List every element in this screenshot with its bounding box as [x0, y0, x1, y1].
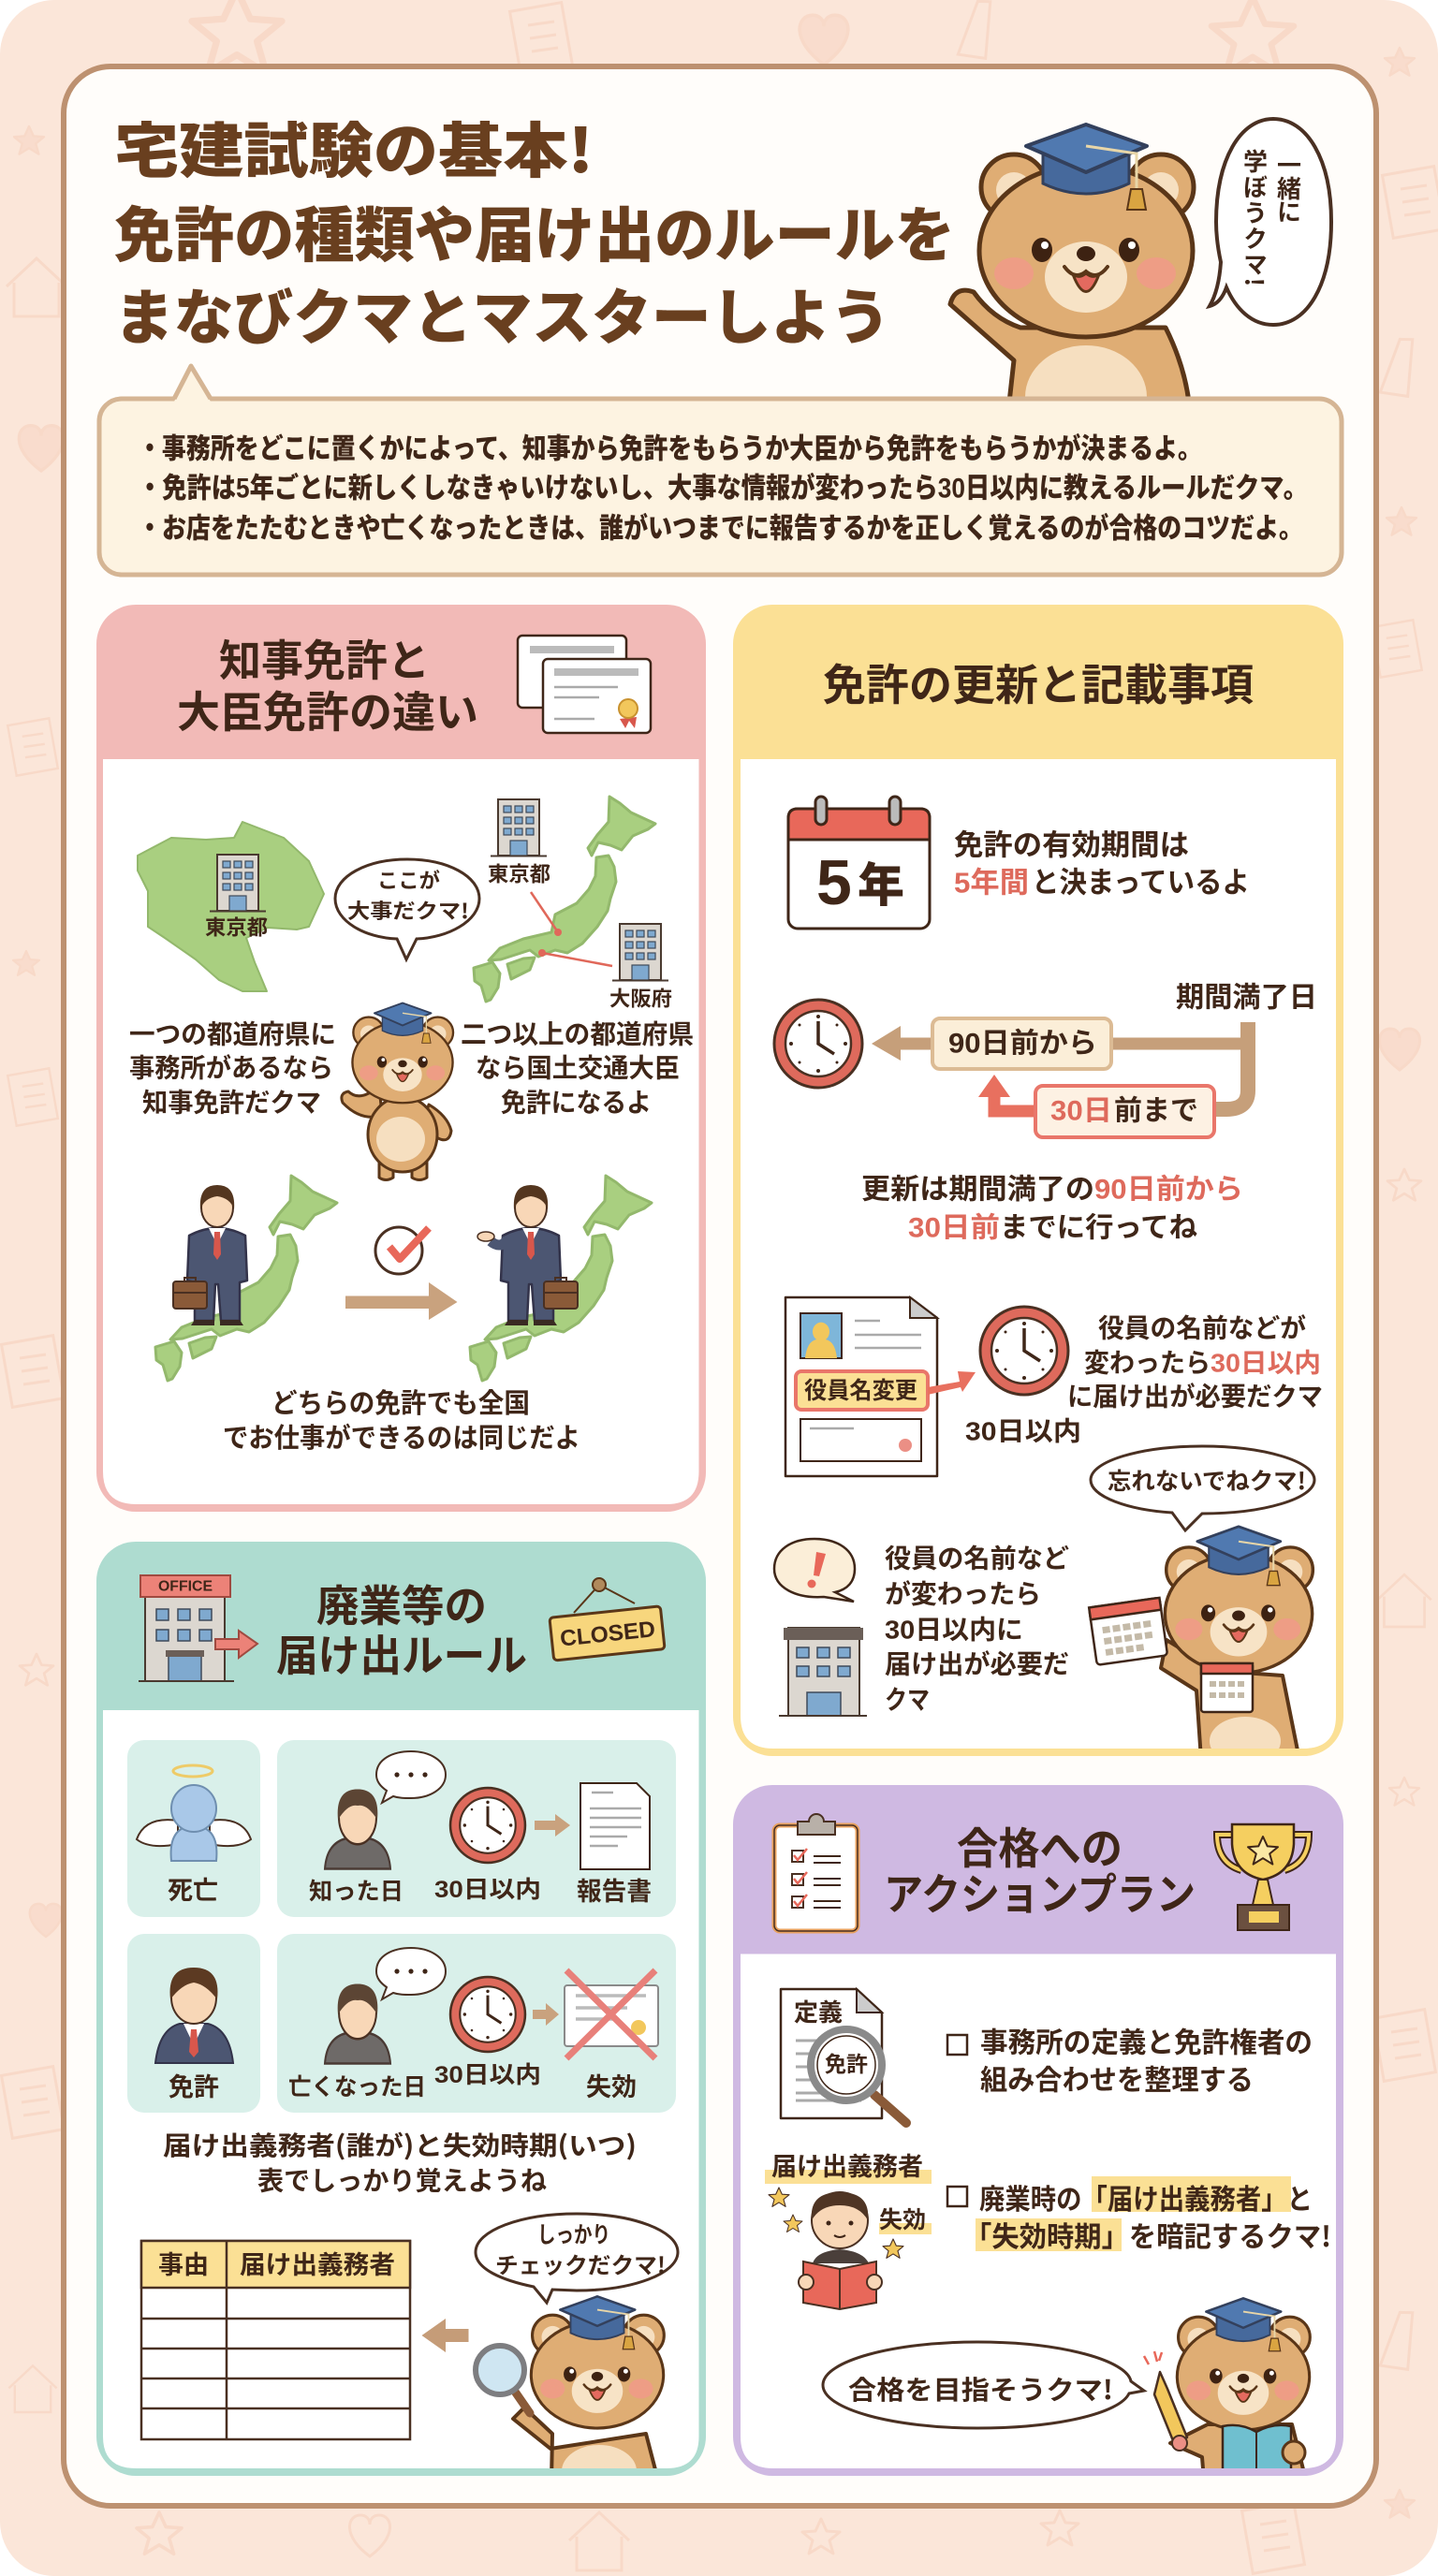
text: 大臣免許: なら国土交通大臣 [476, 1054, 680, 1082]
bear with calendars [1089, 1527, 1313, 1765]
text: 表で覚える: 届け出義務者(誰が)と失効時期(いつ) [163, 2126, 637, 2163]
checklist item 1: 組み合わせを整理する [980, 2065, 1254, 2097]
panel: 廃業等の届け出ルール [96, 1542, 706, 2497]
card: 知った日 flow: 報告書 [577, 1878, 652, 1906]
title: 宅建試験の基本! [114, 104, 594, 190]
icon: document magnifier: 免許 [825, 2052, 868, 2076]
text: 表で覚える [163, 2126, 637, 2196]
illustration: studying person [765, 2153, 932, 2309]
map: Japan with offices: 大阪府 [609, 987, 672, 1011]
heading: 合格への [957, 1824, 1123, 1873]
panel: 知事免許と大臣免許の違い [96, 605, 706, 1512]
card: 亡くなった日 flow: 30日以内 [434, 2062, 541, 2088]
map: Japan with offices: 東京都 [488, 863, 550, 886]
text: 有効期間: 5年間 [954, 867, 1029, 899]
text: 更新: 30日前 [908, 1213, 1000, 1243]
intro box: ・免許は5年ごとに新しくしなきゃいけないし、大事な情報が変わったら30日以内に教えるルールだクマ。 [138, 472, 1308, 504]
timeline: 30日 [1050, 1095, 1112, 1127]
map: Tokyo: 東京都 [205, 915, 268, 940]
timeline: 90日前から [948, 1028, 1097, 1060]
text: 有効期間 [954, 829, 1250, 899]
text: 大臣免許: 二つ以上の都道府県 [461, 1020, 694, 1048]
icon: document: 役員名変更 [804, 1378, 917, 1404]
text: 更新: までに行ってね [1000, 1213, 1197, 1243]
text: 更新: 90日前から [1094, 1174, 1243, 1206]
heading: 知事免許と [219, 637, 430, 685]
text: 届け出: が変わったら [885, 1578, 1041, 1608]
checklist item 2: 廃業時の「届け出義務者」と [979, 2176, 1313, 2217]
checklist item 2: 「失効時期」を暗記するクマ! [964, 2214, 1331, 2255]
text: 知事免許: 一つの都道府県に [129, 1020, 336, 1048]
icon: calendar 5年: 年 [858, 859, 904, 912]
panel: 免許の更新と記載事項 [733, 605, 1343, 1765]
table [141, 2241, 410, 2439]
icon: calendar 5年: 5 [816, 847, 852, 918]
arrow [345, 1282, 457, 1320]
icon: clipboard [774, 1814, 858, 1931]
heading: 免許の更新と記載事項 [823, 661, 1254, 710]
card: 知った日 flow [277, 1740, 676, 1917]
speech bubble: ここが大事だクマ: ここが [377, 869, 440, 893]
speech bubble: しっかりチェック: しっかり [537, 2222, 610, 2248]
speech bubble: ここが大事だクマ [335, 859, 479, 959]
icon: check [375, 1227, 429, 1274]
icon: trophy [1217, 1824, 1309, 1930]
checklist item 1 [947, 2027, 1313, 2097]
icon: closed sign [550, 1578, 665, 1661]
title [114, 104, 955, 357]
heading: アクションプラン [884, 1870, 1196, 1919]
text: 有効期間: と決まっているよ [1032, 867, 1250, 899]
icon: document magnifier: 定義 [794, 1998, 843, 2027]
icon: license cards [518, 636, 651, 733]
icon: document [785, 1297, 937, 1476]
speech bubble: しっかりチェック: チェックだクマ! [495, 2247, 666, 2280]
text: 表で覚える: 表でしっかり覚えようね [257, 2166, 547, 2196]
speech bubble: vertical: 学ぼうクマ! [1238, 149, 1273, 288]
checklist item 1: 事務所の定義と免許権者の [980, 2027, 1313, 2059]
icon: office [139, 1575, 257, 1681]
speech bubble: vertical: 一緒に [1271, 153, 1307, 223]
icon: calendar 5年 [788, 797, 930, 929]
arrow [421, 2319, 468, 2352]
checklist item 2 [947, 2176, 1331, 2255]
text: 知事免許: 知事免許だクマ [142, 1088, 321, 1118]
icon: closed sign: CLOSED [559, 1617, 656, 1652]
title: 免許の種類や届け出のルールを [114, 188, 955, 274]
text: 役員変更 [1067, 1312, 1323, 1412]
text: 届け出: クマ [885, 1685, 930, 1715]
table: 事由 [158, 2251, 209, 2279]
bear with magnifier [473, 2295, 666, 2468]
bear waving [342, 1003, 453, 1179]
text: 届け出: 30日以内に [885, 1616, 1023, 1644]
map: Japan with offices [474, 797, 672, 1011]
intro box [99, 366, 1342, 575]
title: まなびクマとマスターしよう [114, 271, 890, 357]
card: 亡くなった日 flow: 亡くなった日 [288, 2074, 426, 2100]
speech bubble: 合格を目指そう [823, 2342, 1144, 2428]
speech bubble: ここが大事だクマ: 大事だクマ! [347, 895, 469, 925]
intro box: ・事務所をどこに置くかによって、知事から免許をもらうか大臣から免許をもらうかが決まるよ。 [138, 432, 1202, 464]
map: businessperson left [155, 1176, 337, 1381]
map: Tokyo [138, 822, 324, 991]
heading [884, 1824, 1196, 1919]
speech bubble: 忘れないでねクマ [1091, 1446, 1314, 1530]
text: 知事免許 [129, 1020, 336, 1118]
icon: clock [774, 1000, 862, 1088]
illustration: studying person: 失効 [879, 2207, 926, 2233]
heading [177, 637, 478, 737]
text: 役員変更: に届け出が必要だクマ [1067, 1382, 1323, 1412]
bear with pencil [1144, 2298, 1310, 2481]
text: 役員変更: 30日以内 [1211, 1348, 1321, 1378]
panel: 合格へのアクションプラン [733, 1785, 1343, 2481]
heading: 廃業等の [316, 1582, 487, 1631]
text: 届け出 [885, 1544, 1069, 1715]
label: 30日以内: 30日以内 [965, 1417, 1081, 1445]
speech bubble: 忘れないでねクマ: 忘れないでねクマ! [1108, 1463, 1306, 1497]
text: 全国: どちらの免許でも全国 [271, 1388, 530, 1419]
timeline [872, 1018, 1248, 1137]
card: 亡くなった日 flow: 失効 [586, 2073, 637, 2101]
text: 大臣免許: 免許になるよ [501, 1088, 652, 1118]
text: 役員変更: 役員の名前などが [1098, 1312, 1306, 1342]
illustration: studying person: 届け出義務者 [771, 2153, 923, 2181]
icon: clock [980, 1307, 1068, 1395]
text: 届け出: 役員の名前など [885, 1544, 1069, 1573]
icon: document magnifier [781, 1989, 906, 2123]
heading [276, 1582, 527, 1680]
text: 有効期間: 免許の有効期間は [954, 829, 1189, 861]
speech bubble: しっかりチェック [476, 2214, 678, 2303]
card: 免許 [127, 1934, 260, 2113]
text: 知事免許: 事務所があるなら [129, 1052, 333, 1082]
map: businessperson right [470, 1176, 652, 1381]
card: 知った日 flow: 知った日 [309, 1879, 404, 1905]
text: 大臣免許 [461, 1020, 694, 1118]
card: 死亡: 死亡 [168, 1877, 218, 1905]
table: 届け出義務者 [240, 2251, 395, 2279]
text: 更新: 更新は期間満了の [861, 1174, 1094, 1206]
card: 免許: 免許 [169, 2073, 219, 2101]
arrow [928, 1371, 976, 1395]
text: 更新 [861, 1174, 1243, 1243]
text: 役員変更: 変わったら [1084, 1348, 1211, 1378]
speech bubble: 合格を目指そう: 合格を目指そうクマ! [848, 2370, 1113, 2408]
speech bubble: vertical [1210, 119, 1331, 325]
mascot bear: header [950, 124, 1194, 448]
heading: 大臣免許の違い [177, 688, 478, 737]
text: 全国 [223, 1388, 580, 1454]
card: 亡くなった日 flow [277, 1934, 676, 2113]
card: 知った日 flow: 30日以内 [434, 1877, 541, 1903]
icon: alert bubble [774, 1539, 855, 1602]
heading: 届け出ルール [276, 1632, 527, 1680]
text: 全国: でお仕事ができるのは同じだよ [223, 1422, 580, 1454]
text: 届け出: 届け出が必要だ [885, 1649, 1069, 1679]
label: 期間満了日: 期間満了日 [1176, 983, 1317, 1013]
icon: office: OFFICE [158, 1578, 213, 1595]
icon: building [779, 1628, 867, 1716]
timeline: 前まで [1114, 1095, 1198, 1127]
card: 死亡 [127, 1740, 260, 1917]
